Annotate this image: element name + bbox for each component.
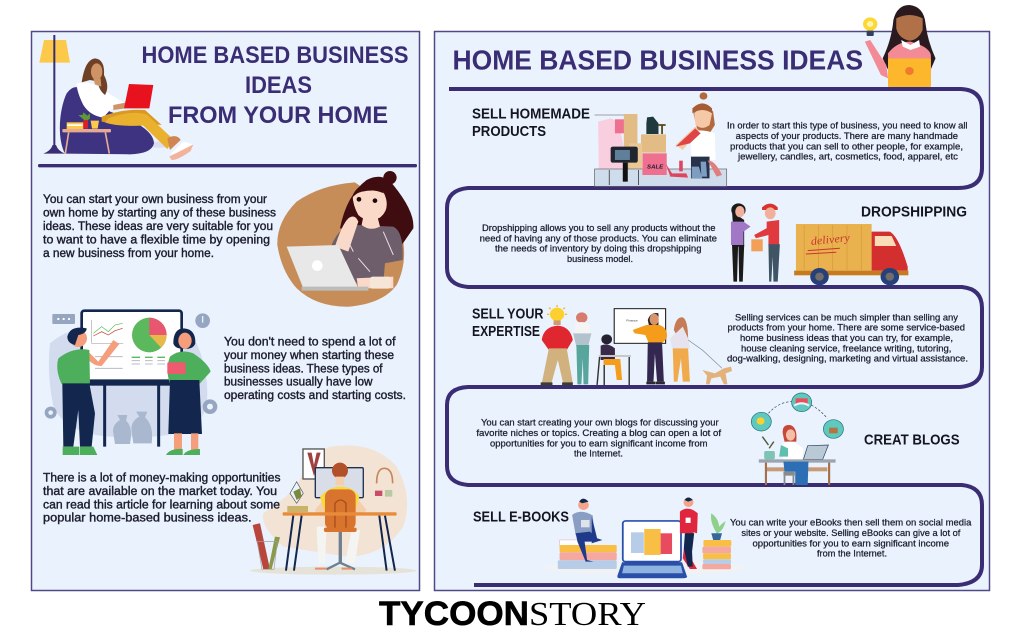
heading: sell your expertise: SELL YOUR [472, 305, 544, 322]
text block: opportunities: popular home-based business ideas. [43, 513, 251, 525]
text block: opportunities: that are available on the market today. You [43, 486, 277, 498]
text block: low costs [224, 337, 406, 402]
heading: sell your expertise: EXPERTISE [472, 323, 540, 340]
heading: sell homemade products: PRODUCTS [472, 123, 546, 140]
illustration: service workers [541, 305, 732, 386]
text block: opportunities [43, 473, 281, 525]
text block: e-books: sites or your website. Selling eBooks can give a lot of [741, 527, 961, 538]
illustration: seller with products and camera: SALE [647, 164, 664, 170]
text block: intro [43, 194, 276, 260]
panel: left [32, 32, 420, 590]
text block: dropshipping: need of having any of those products. You can eliminate [480, 232, 717, 243]
text block: homemade products: In order to start this type of business, you need to know all [727, 120, 968, 131]
text block: expertise: home business ideas that you can try, for example, [740, 332, 953, 343]
text block: opportunities: There is a lot of money-making opportunities [43, 473, 281, 485]
left title: FROM YOUR HOME [168, 102, 388, 129]
logo: TycoonStory: STORY [529, 596, 646, 633]
text block: e-books: You can write your eBooks then sell them on social media [730, 517, 972, 528]
text block: dropshipping [480, 222, 717, 264]
text block: low costs: business ideas. These types of [224, 363, 383, 375]
text block: expertise: house cleaning service, freelance writing, tutoring, [741, 342, 951, 353]
text block: dropshipping: Dropshipping allows you to sell any products without the [482, 222, 716, 233]
illustration: blogger at desk [751, 393, 843, 485]
logo: TycoonStory: TYCOON [379, 595, 529, 633]
ribbon path [447, 89, 982, 585]
main title: HOME BASED BUSINESS IDEAS [452, 44, 863, 76]
heading: sell homemade products [472, 105, 590, 140]
text block: intro: You can start your own business from your [43, 194, 267, 206]
text block: blogs: opportunities for you to earn significant income from [490, 437, 708, 448]
illustration: person working at desk [250, 445, 417, 575]
text block: intro: ideas. These ideas are very suitable for you [43, 221, 273, 233]
illustration: two people at a chart board [45, 311, 217, 455]
illustration: service workers: Finance [626, 319, 638, 323]
heading: dropshipping: DROPSHIPPING [861, 204, 967, 221]
text block: expertise [727, 311, 968, 364]
left title: HOME BASED BUSINESS [142, 42, 408, 69]
heading: creat blogs: CREAT BLOGS [864, 432, 960, 449]
text block: low costs: You don't need to spend a lot of [224, 337, 396, 349]
text block: low costs: businesses usually have low [224, 377, 373, 389]
text block: homemade products: aspects of your products. There are many handmade [736, 130, 958, 141]
text block: opportunities: can read this article for learning about some [43, 499, 280, 511]
divider [38, 164, 417, 167]
illustration: woman with lightbulb and laptop [863, 5, 936, 87]
text block: intro: to want to have a flexible time by opening [43, 234, 270, 246]
text block: homemade products [727, 120, 968, 162]
heading: sell e-books: SELL E-BOOKS [473, 509, 569, 526]
illustration: e-books with laptop and stacks [544, 497, 747, 578]
heading: sell your expertise [472, 305, 544, 340]
illustration: seller with products and camera [595, 92, 727, 186]
left title: IDEAS [245, 72, 312, 99]
text block: expertise: products from your home. There are some service-based [728, 322, 965, 333]
text block: low costs: operating costs and starting costs. [224, 390, 406, 402]
illustration: woman thinking at laptop [277, 171, 413, 307]
text block: dropshipping: business model. [567, 253, 633, 264]
text block: expertise: dog-walking, designing, marketing and virtual assistance. [727, 353, 968, 364]
text block: blogs: You can start creating your own blogs for discussing your [481, 417, 719, 428]
text block: blogs [476, 417, 721, 459]
heading: sell homemade products: SELL HOMEMADE [472, 105, 590, 122]
text block: dropshipping: the needs of inventory by doing this dropshipping [495, 243, 702, 254]
text block: expertise: Selling services can be much simpler than selling any [735, 311, 958, 322]
text block: intro: a new business from your home. [43, 248, 214, 260]
text block: e-books: opportunities for you to earn significant income [752, 537, 949, 548]
illustration: delivery people and truck: delivery [810, 231, 851, 248]
text block: low costs: your money when starting these [224, 350, 394, 362]
illustration: woman on beanbag with lamp [39, 35, 193, 160]
left title [142, 42, 408, 129]
text block: homemade products: products that you can sell to other people, for example, [730, 140, 963, 151]
illustration: delivery people and truck [731, 203, 908, 285]
text block: homemade products: jewellery, candles, art, cosmetics, food, apparel, etc [737, 151, 958, 162]
logo: TycoonStory [379, 595, 646, 633]
text block: blogs: the Internet. [574, 448, 623, 459]
text block: intro: own home by starting any of these business [43, 208, 276, 220]
text block: blogs: favorite niches or topics. Creating a blog can open a lot of [476, 427, 721, 438]
text block: e-books: from the Internet. [817, 548, 887, 559]
panel: right [434, 32, 990, 590]
text block: e-books [730, 517, 972, 559]
